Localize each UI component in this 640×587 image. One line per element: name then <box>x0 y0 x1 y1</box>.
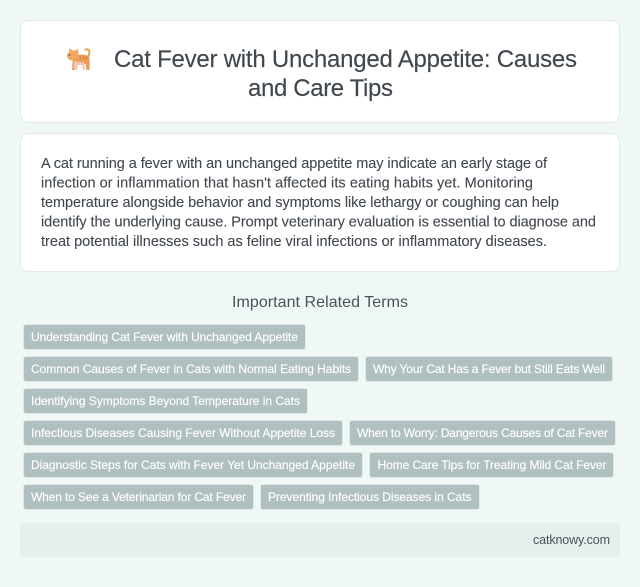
heading: and Care Tips <box>248 75 393 102</box>
tag <box>24 484 254 510</box>
tag <box>24 324 306 350</box>
tag <box>260 484 480 510</box>
footer site name: catknowy.com <box>533 533 610 547</box>
tag: When to Worry: Dangerous Causes of Cat Fever <box>357 426 608 440</box>
tag <box>370 452 614 478</box>
text block: summary paragraph: treat potential illnesses such as feline viral infections or inflammatory diseases. <box>41 234 547 250</box>
tag: Home Care Tips for Treating Mild Cat Fever <box>378 458 606 472</box>
panel: summary <box>20 134 620 272</box>
text block: summary paragraph: identify the underlying cause. Prompt veterinary evaluation is essential to diagnose and <box>41 214 596 230</box>
icon: cat <box>67 48 90 70</box>
tag <box>366 356 612 382</box>
text block: summary paragraph <box>41 156 596 250</box>
tag: Diagnostic Steps for Cats with Fever Yet Unchanged Appetite <box>31 458 355 472</box>
heading: related terms: Important Related Terms <box>232 294 408 311</box>
tag: Common Causes of Fever in Cats with Normal Eating Habits <box>31 362 351 376</box>
tag <box>350 420 616 446</box>
footer bar <box>20 523 620 557</box>
tag <box>24 388 308 414</box>
heading <box>114 46 577 102</box>
tag: Preventing Infectious Diseases in Cats <box>268 490 472 504</box>
heading: Cat Fever with Unchanged Appetite: Causes <box>114 46 577 73</box>
panel: title card <box>20 20 620 122</box>
tag: When to See a Veterinarian for Cat Fever <box>31 490 246 504</box>
text block: summary paragraph: A cat running a fever with an unchanged appetite may indicate an early stage of <box>41 156 548 172</box>
tag: Infectious Diseases Causing Fever Without Appetite Loss <box>31 426 335 440</box>
related terms tags <box>24 324 616 510</box>
text block: summary paragraph: infection or inflammation that hasn't affected its eating habits yet. Monitoring <box>41 176 533 192</box>
tag: Understanding Cat Fever with Unchanged Appetite <box>31 330 298 344</box>
tag <box>24 420 342 446</box>
tag <box>24 356 358 382</box>
tag: Why Your Cat Has a Fever but Still Eats Well <box>373 362 605 376</box>
tag: Identifying Symptoms Beyond Temperature in Cats <box>31 394 300 408</box>
text block: summary paragraph: temperature alongside behavior and symptoms like lethargy or coughing can help <box>41 195 559 211</box>
tag <box>24 452 362 478</box>
